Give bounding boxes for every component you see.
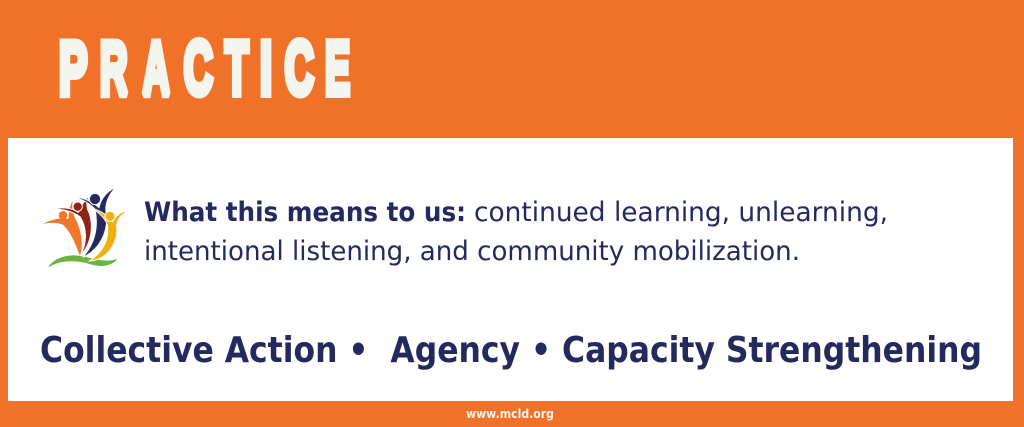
logo: navy figure [65,187,116,257]
logo: yellow figure [87,208,129,261]
footer website: www.mcld.org [466,407,554,421]
line 1 continuation: continued learning, unlearning, [474,197,888,228]
panel: white content card [8,138,1013,401]
logo: orange figure [43,201,82,256]
line 1 bold lead: What this means to us: [144,197,466,228]
infographic canvas: E [325,26,350,110]
title: PRACTICE: I [260,26,272,110]
title: PRACTICE: C [184,26,213,110]
line 2: intentional listening, and community mobilization. [144,236,800,267]
logo: green wave [48,255,117,267]
text block: what this means to us [144,197,888,267]
title: PRACTICE: C [285,26,314,110]
title: PRACTICE: A [143,26,170,110]
title: PRACTICE [59,26,350,110]
title: PRACTICE: R [100,26,128,110]
icon: MCLD logo of raised-arm figures [43,187,129,267]
title: PRACTICE: P [59,26,87,110]
title: PRACTICE: T [225,26,248,110]
logo: dark red figure [53,193,93,256]
